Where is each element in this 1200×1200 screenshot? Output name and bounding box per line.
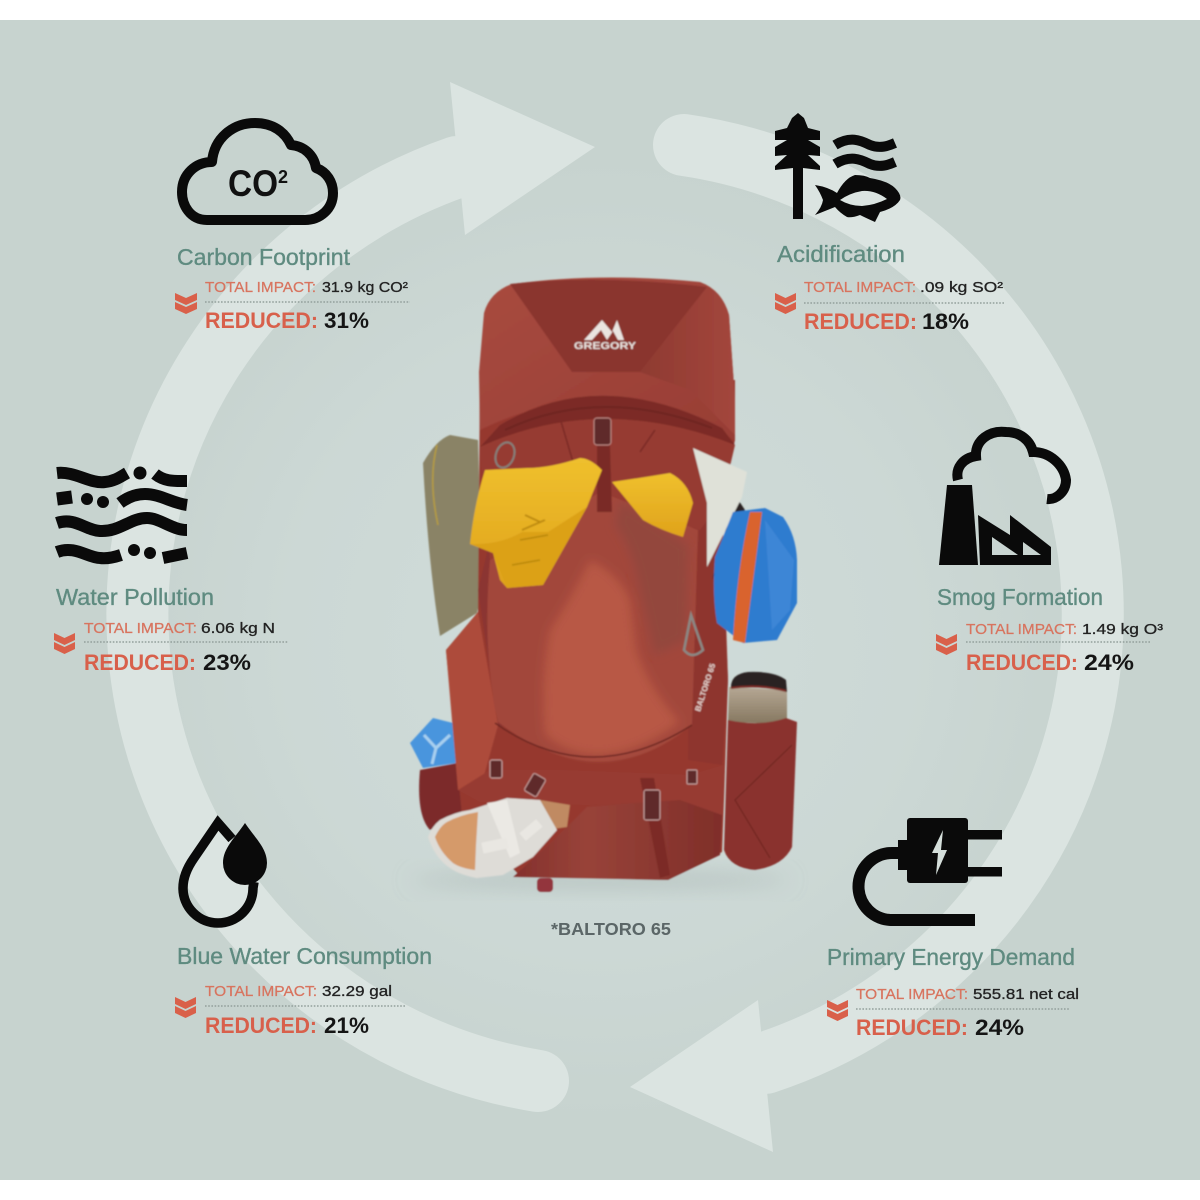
circular arrows (137, 82, 1093, 1152)
panel: carbon footprint (175, 123, 410, 333)
heading: Carbon Footprint (177, 244, 351, 270)
reduced: REDUCED: (804, 309, 917, 334)
left side pocket (419, 763, 467, 830)
reduced: 24% (1084, 650, 1134, 675)
main body (446, 380, 735, 880)
bottom compartment (513, 800, 722, 880)
reduced (856, 1015, 1024, 1040)
total impact: TOTAL IMPACT: (205, 280, 316, 296)
olive stuff sack (423, 435, 482, 636)
chevrons (54, 633, 75, 654)
dark gap behind pouch (712, 495, 745, 580)
reduced: REDUCED: (856, 1015, 968, 1040)
left dark strip (478, 540, 515, 730)
bottle (728, 672, 787, 724)
total impact (205, 984, 392, 1000)
lid right panel (640, 287, 735, 435)
panel: water pollution (54, 466, 288, 675)
blue pouch (714, 508, 797, 643)
model name on pack: BALTORO 65 (693, 662, 718, 713)
heading: Acidification (777, 241, 905, 267)
total impact (804, 280, 1003, 296)
chevrons (775, 293, 796, 314)
icon: CO2 cloud (182, 123, 333, 220)
icon: factory and smog (939, 432, 1066, 565)
centre strap (597, 445, 612, 512)
total impact: 6.06 kg N (201, 621, 275, 637)
lid centre panel (510, 280, 707, 372)
heading: Smog Formation (937, 584, 1103, 610)
reduced: 18% (922, 309, 969, 334)
total impact (205, 280, 408, 296)
logo (574, 320, 636, 352)
backpack photo illustration (410, 277, 797, 892)
front mesh pocket (487, 490, 698, 762)
panel: acidification (775, 113, 1005, 334)
left body side panel (446, 612, 498, 790)
top front panel (480, 419, 735, 560)
total impact (84, 621, 275, 637)
reduced (966, 650, 1134, 675)
reduced: 23% (203, 650, 251, 675)
yellow jacket (470, 458, 693, 588)
icon: CO2 cloud: CO (228, 163, 278, 204)
reduced: REDUCED: (966, 650, 1078, 675)
icon: plug (858, 818, 1002, 920)
heading: Water Pollution (56, 584, 214, 610)
icon: CO2 cloud: 2 (278, 167, 288, 187)
sandal (428, 798, 570, 878)
bottle pocket (724, 718, 797, 870)
ground shadow (410, 873, 790, 887)
ring loop (492, 440, 518, 470)
carabiner (684, 615, 703, 655)
mesh lighter centre (543, 560, 680, 755)
belt buckles (490, 760, 697, 820)
reduced: REDUCED: (205, 308, 318, 333)
heading: Primary Energy Demand (827, 944, 1075, 970)
reduced: 24% (975, 1015, 1024, 1040)
panel: blue water consumption (175, 823, 432, 1038)
total impact: 555.81 net cal (973, 987, 1079, 1003)
arrow: lower left arc to top (137, 82, 595, 1081)
heading: Blue Water Consumption (177, 943, 432, 969)
arrow: upper right arc to bottom (630, 145, 1093, 1152)
hip belt (458, 765, 724, 815)
right body side panel (688, 500, 728, 765)
caption: *BALTORO 65 (551, 919, 671, 939)
total impact: 32.29 gal (322, 984, 392, 1000)
total impact: 1.49 kg O³ (1082, 622, 1163, 638)
panel: smog formation (936, 432, 1163, 675)
chevrons (175, 997, 196, 1018)
total impact (856, 987, 1079, 1003)
folded map (693, 448, 747, 567)
reduced: 21% (324, 1013, 369, 1038)
logo: GREGORY (574, 340, 636, 352)
total impact: 31.9 kg CO² (322, 280, 408, 296)
reduced: REDUCED: (205, 1013, 317, 1038)
icon: polluted water waves (57, 466, 187, 559)
buckle (594, 418, 611, 445)
total impact: TOTAL IMPACT: (966, 622, 1077, 638)
reduced: REDUCED: (84, 650, 196, 675)
total impact (966, 622, 1163, 638)
total impact: TOTAL IMPACT: (856, 987, 968, 1003)
total impact: .09 kg SO² (920, 280, 1003, 296)
panel: primary energy demand (827, 818, 1079, 1040)
chevrons (827, 1000, 848, 1021)
lid (479, 277, 735, 440)
reduced (84, 650, 251, 675)
drawcord toggle (537, 878, 553, 892)
total impact: TOTAL IMPACT: (804, 280, 916, 296)
lid lower band (480, 396, 735, 447)
chevrons (175, 293, 197, 314)
icon: water drops (183, 823, 267, 923)
icon: tree and fish (775, 113, 900, 222)
chevrons (936, 634, 957, 655)
right dark mesh (615, 500, 688, 655)
total impact: TOTAL IMPACT: (205, 984, 317, 1000)
blue stuff sack left (410, 718, 456, 768)
compression strap (640, 778, 670, 878)
total impact: TOTAL IMPACT: (84, 621, 197, 637)
reduced: 31% (324, 308, 369, 333)
